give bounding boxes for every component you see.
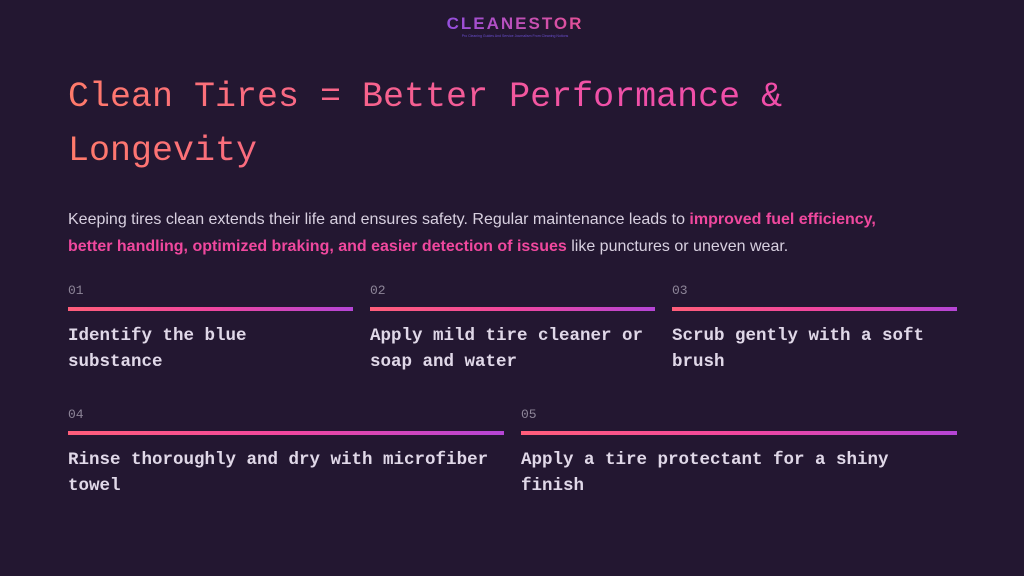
- step 04: [68, 407, 504, 496]
- step 02: [370, 283, 655, 372]
- intro text: Keeping tires clean extends their life and ensures safety. Regular maintenance leads to improved fuel efficiency, better handling, optimized braking, and easier detection of issues like punctures or uneven wear.: [68, 211, 876, 255]
- step 05: [521, 407, 957, 496]
- step 03: Scrub gently with a soft brush: [672, 326, 924, 372]
- title: [68, 70, 968, 178]
- step 03: [672, 283, 957, 372]
- step 01: [68, 283, 353, 372]
- step 01: Identify the blue substance: [68, 326, 247, 372]
- step 04: 04: [68, 407, 84, 422]
- step 05: Apply a tire protectant for a shiny finish: [521, 450, 889, 496]
- title: Clean Tires = Better Performance & Longevity: [68, 77, 782, 171]
- step 04: Rinse thoroughly and dry with microfiber towel: [68, 450, 488, 496]
- logo: Pro Cleaning Guides And Service Journalism From Cleaning Notions: [462, 34, 568, 38]
- step 01: 01: [68, 283, 84, 298]
- step 02: 02: [370, 283, 386, 298]
- step 03: 03: [672, 283, 688, 298]
- step 05: 05: [521, 407, 537, 422]
- step 02: Apply mild tire cleaner or soap and water: [370, 326, 643, 372]
- logo: CLEANESTOR: [447, 14, 583, 33]
